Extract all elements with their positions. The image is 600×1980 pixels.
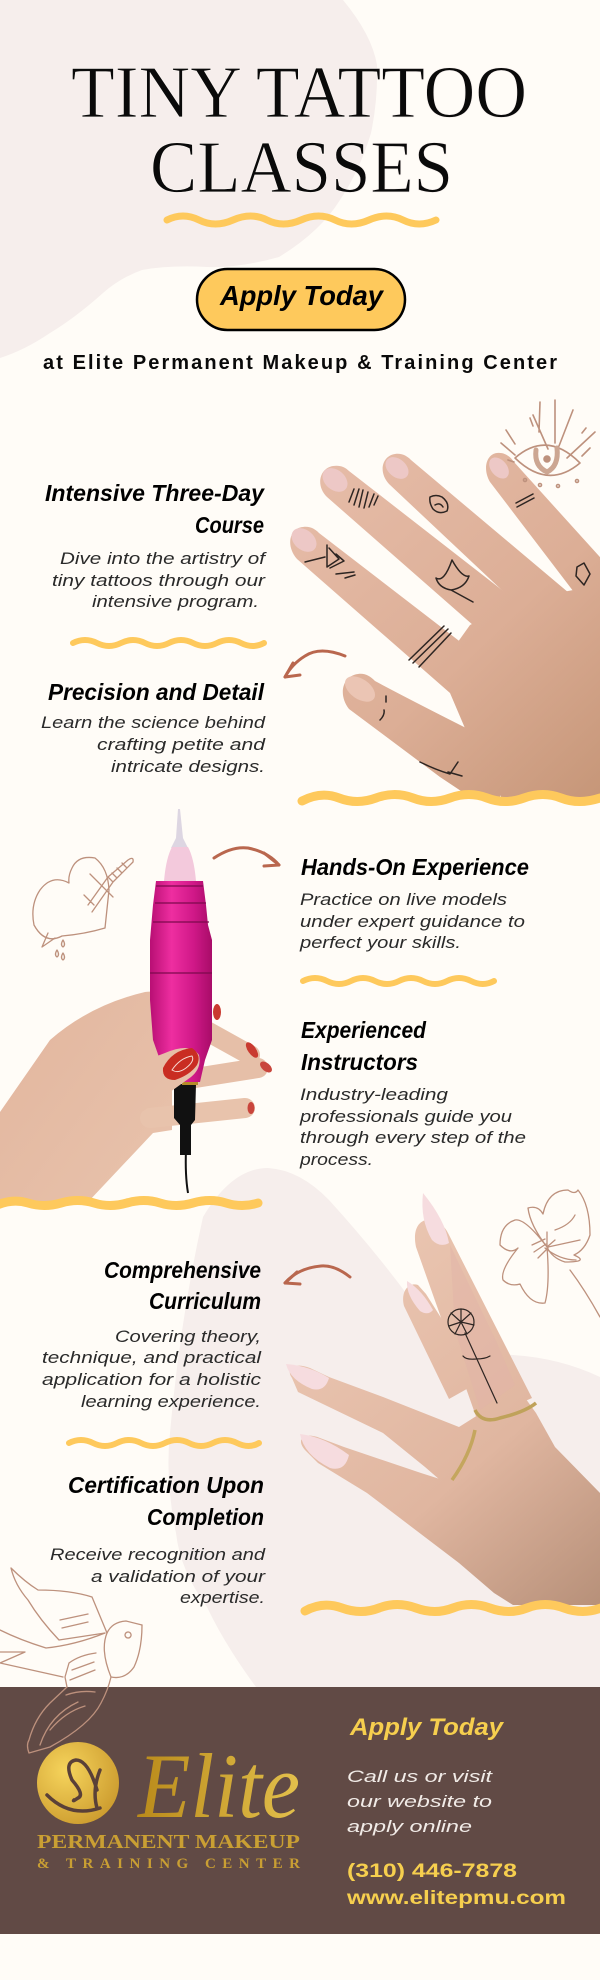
wire and connector [186, 1150, 188, 1193]
wave under hand [302, 794, 600, 802]
footer panel [0, 1687, 600, 1934]
text block: precision and detail: intricate designs. [111, 758, 265, 776]
pen body [150, 881, 212, 1082]
rings [475, 1403, 536, 1420]
photo: tattooed hand [287, 453, 600, 797]
subtitle: at Elite Permanent Makeup & Training Center [43, 352, 557, 374]
photo: hand with flower tattoo [286, 1193, 600, 1605]
tattoo marks [305, 489, 590, 776]
text block: experienced instructors: Experienced [301, 1017, 427, 1043]
title: CLASSES [150, 127, 453, 209]
text block: hands-on experience: Practice on live models [300, 891, 507, 909]
text block: comprehensive curriculum: Curriculum [149, 1288, 261, 1314]
text block: experienced instructors: through every step of the [300, 1129, 526, 1147]
text block: certification upon completion: expertise. [180, 1589, 265, 1607]
divider wave 3 [69, 1440, 259, 1446]
text block: hands-on experience [299, 854, 529, 952]
text block: comprehensive curriculum: application for a holistic [42, 1371, 262, 1389]
text block: hands-on experience: perfect your skills. [299, 934, 461, 952]
icon: eye sketch [501, 400, 595, 488]
text block: intensive three-day course: Intensive Three-Day [45, 480, 265, 506]
footer contact text [346, 1714, 566, 1909]
arrow: points right to hands-on [214, 848, 279, 866]
text block: experienced instructors: process. [299, 1151, 373, 1169]
icon: heart and dagger sketch [33, 857, 133, 960]
text block: experienced instructors [299, 1017, 526, 1169]
icon: swallow sketch [0, 1568, 142, 1753]
text block: precision and detail: crafting petite and [97, 736, 266, 754]
title: TINY TATTOO [71, 52, 527, 134]
divider wave 1 [73, 640, 264, 646]
footer contact text: (310) 446-7878 [347, 1861, 517, 1882]
text block: certification upon completion: Completion [147, 1504, 264, 1530]
text block: comprehensive curriculum: technique, and practical [42, 1349, 263, 1367]
text block: comprehensive curriculum [42, 1257, 263, 1411]
text block: experienced instructors: professionals guide you [299, 1108, 512, 1126]
text block: precision and detail: Precision and Detail [48, 679, 265, 705]
logo: PERMANENT MAKEUP [37, 1831, 300, 1853]
icon: flower sketch [500, 1190, 600, 1317]
background blob: lower right [168, 1168, 600, 1687]
text block: experienced instructors: Instructors [301, 1049, 418, 1075]
text block: precision and detail [41, 679, 266, 776]
text block: precision and detail: Learn the science behind [41, 714, 266, 732]
logo: & TRAINING CENTER [37, 1856, 300, 1872]
footer contact text: www.elitepmu.com [346, 1888, 566, 1909]
arrow: points left to precision [285, 651, 345, 677]
title underline wave [167, 216, 436, 224]
text block: certification upon completion: a validation of your [91, 1568, 267, 1586]
needle and cap [171, 809, 188, 848]
wave under pen [0, 1200, 258, 1206]
text block: certification upon completion [50, 1472, 267, 1607]
text block: certification upon completion: Certification Upon [68, 1472, 264, 1498]
apply today button [197, 269, 405, 330]
logo [37, 1735, 300, 1872]
text block: comprehensive curriculum: learning experience. [81, 1393, 261, 1411]
background blob: top [0, 0, 377, 358]
text block: certification upon completion: Receive recognition and [50, 1546, 266, 1564]
photo: hand holding pink tattoo pen [0, 809, 274, 1202]
text block: hands-on experience: Hands-On Experience [301, 854, 529, 880]
text block: comprehensive curriculum: Covering theory, [115, 1328, 261, 1346]
text block: intensive three-day course: tiny tattoos through our [52, 572, 267, 590]
text block: hands-on experience: under expert guidance to [300, 913, 525, 931]
text block: intensive three-day course: Dive into the artistry of [60, 550, 268, 568]
hand behind pen [0, 992, 172, 1202]
footer contact text: apply online [347, 1817, 472, 1836]
arrow: points left to comprehensive curriculum [285, 1266, 350, 1284]
footer contact text: Apply Today [349, 1714, 505, 1741]
title [71, 52, 527, 209]
text block: intensive three-day course: Course [195, 512, 264, 538]
text block: intensive three-day course: intensive program. [92, 593, 259, 611]
footer contact text: our website to [347, 1792, 492, 1811]
flower tattoo [448, 1309, 497, 1403]
wave under flower hand [305, 1604, 600, 1612]
text block: experienced instructors: Industry-leading [300, 1086, 449, 1104]
text block: intensive three-day course [45, 480, 268, 611]
apply today button: Apply Today [219, 280, 384, 311]
text block: comprehensive curriculum: Comprehensive [104, 1257, 261, 1283]
divider wave 2 [303, 978, 494, 984]
logo: Elite [136, 1735, 300, 1837]
footer contact text: Call us or visit [347, 1767, 494, 1786]
thumb over pen [60, 1048, 200, 1135]
